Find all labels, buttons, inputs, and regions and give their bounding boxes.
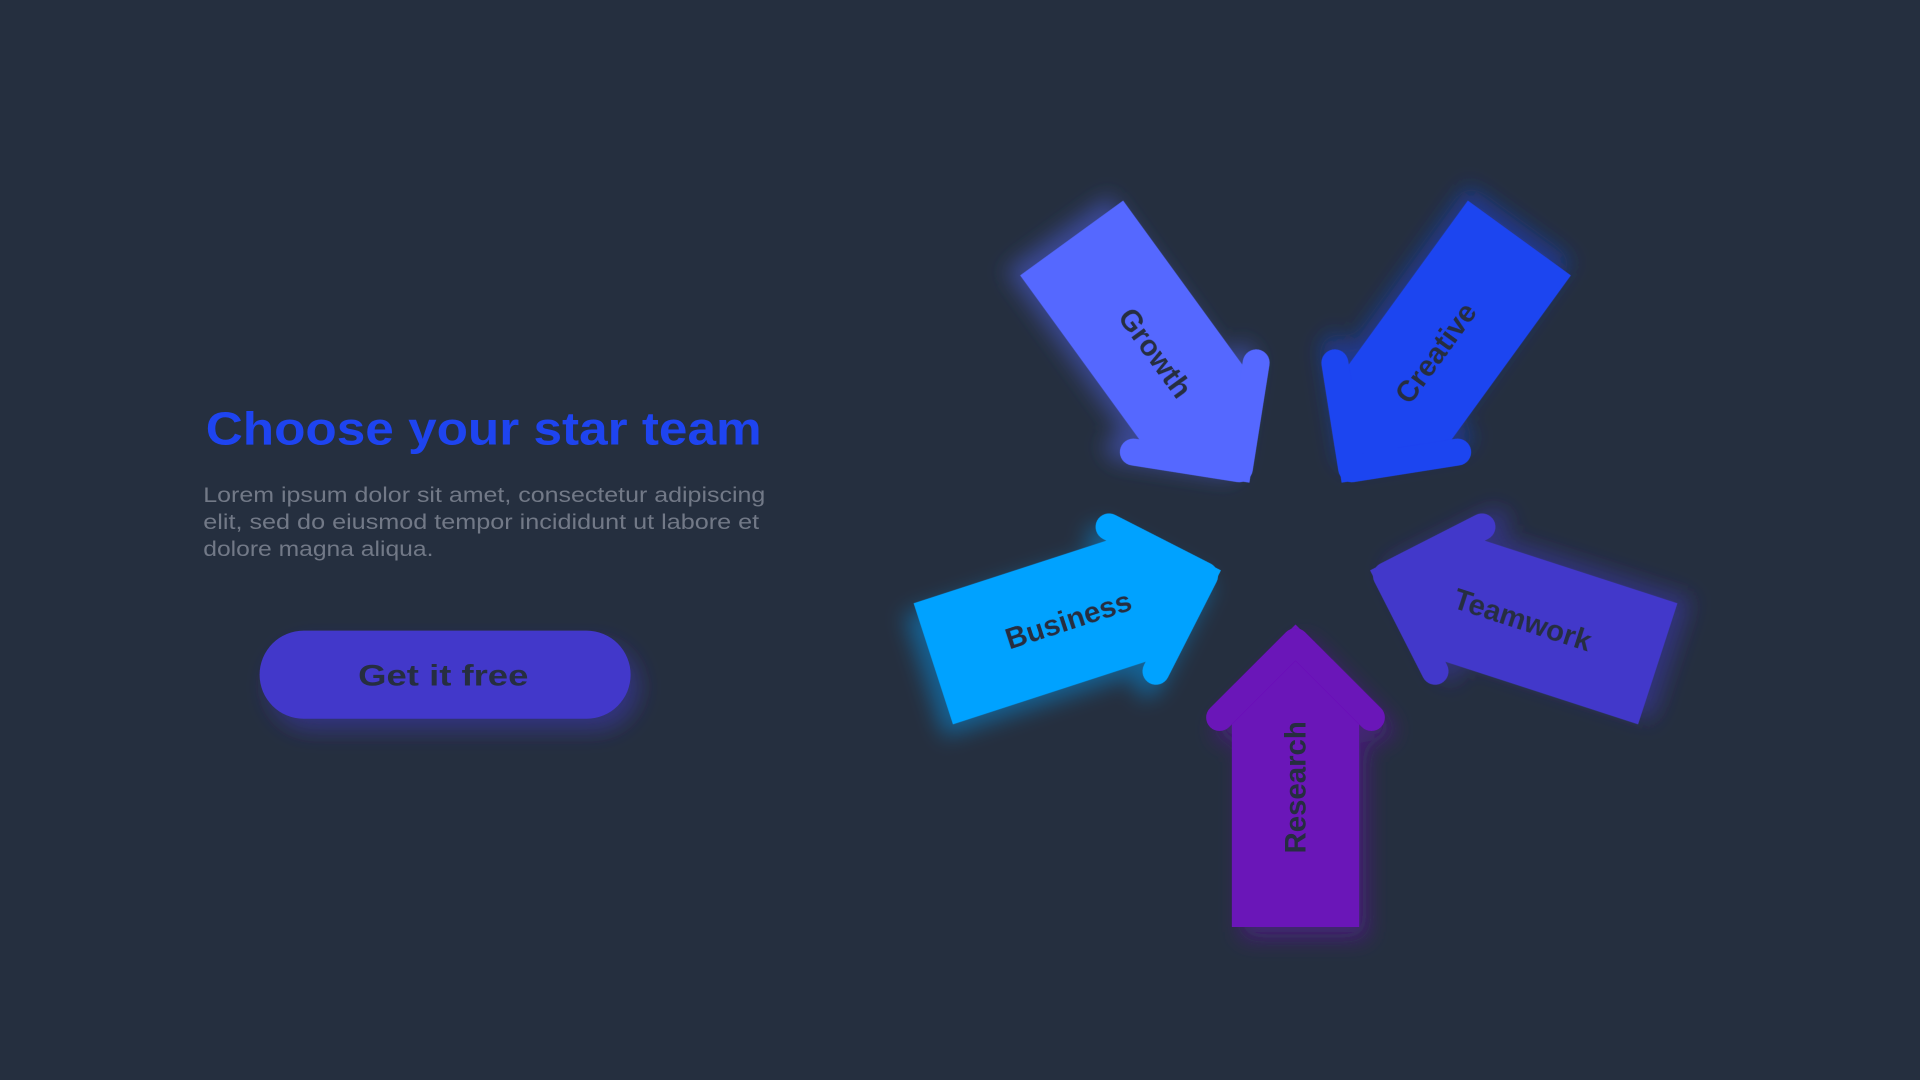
paragraph: dolore magna aliqua. — [203, 538, 433, 561]
arrow: Growth: Growth — [1111, 302, 1198, 404]
star diagram — [910, 193, 1681, 927]
arrow: Business — [910, 498, 1244, 736]
arrow: Teamwork — [1347, 498, 1681, 736]
button: Get it free — [358, 660, 528, 693]
paragraph: Lorem ipsum dolor sit amet, consectetur adipiscing — [203, 484, 765, 507]
arrow: Research: Research — [1279, 721, 1312, 853]
arrow: Creative — [1280, 193, 1581, 527]
paragraph — [203, 484, 765, 561]
arrow: Growth — [1010, 193, 1311, 527]
arrow: Teamwork: Teamwork — [1449, 582, 1596, 658]
button — [260, 631, 631, 719]
paragraph: elit, sed do eiusmod tempor incididunt ut labore et — [203, 511, 759, 534]
arrow: Business: Business — [1001, 584, 1136, 656]
arrow: Research — [1220, 624, 1371, 927]
title: Choose your star team — [206, 402, 762, 454]
arrow: Creative: Creative — [1389, 297, 1484, 410]
